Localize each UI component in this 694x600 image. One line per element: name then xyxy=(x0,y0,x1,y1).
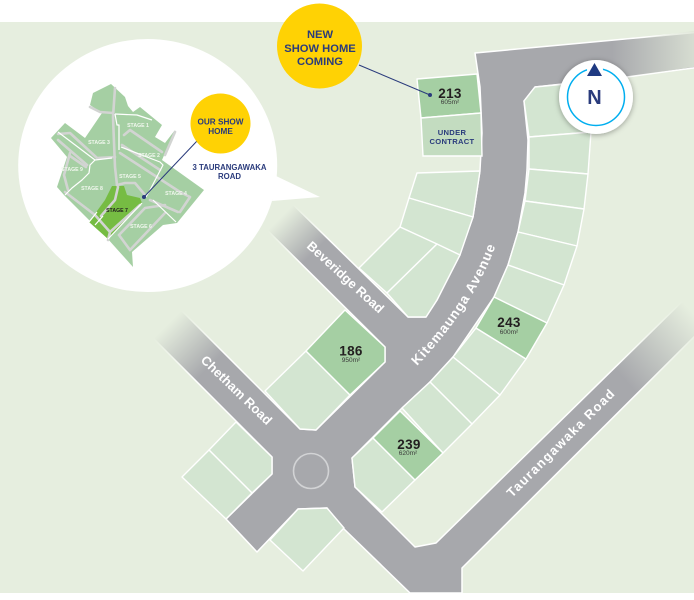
mini map: stage 7 xyxy=(89,186,142,239)
mini map: estate stages: STAGE 8 xyxy=(81,186,103,192)
address text: 3 TAURANGAWAKA xyxy=(193,163,267,172)
mini map: estate stages: STAGE 9 xyxy=(61,167,83,173)
lot 243: 243 xyxy=(497,315,521,330)
new show home badge: COMING xyxy=(297,56,343,68)
lots: west side of Kitemaunga Avenue xyxy=(265,171,480,430)
mini map: estate stages xyxy=(51,84,204,267)
lot 239: 620m² xyxy=(399,450,418,457)
new show home badge: SHOW HOME xyxy=(284,43,356,55)
address text: ROAD xyxy=(218,172,241,181)
lot 213 xyxy=(417,74,481,118)
lots: around the roundabout xyxy=(182,422,344,571)
mini map: estate stages: STAGE 2 xyxy=(138,153,160,159)
roundabout xyxy=(294,454,328,488)
new show home leader line xyxy=(359,65,432,97)
mini map: estate stages: STAGE 5 xyxy=(119,174,141,180)
path used by the Kitemaunga label xyxy=(417,242,497,366)
lot under contract: CONTRACT xyxy=(429,137,475,146)
lot 213: 213 xyxy=(438,86,462,101)
lot under contract xyxy=(421,113,482,156)
road label: Chetham Road: Chetham Road xyxy=(198,352,275,428)
north compass: N xyxy=(587,87,602,109)
lot 186 xyxy=(306,310,385,395)
road label: Beveridge Road: Beveridge Road xyxy=(304,238,387,316)
road label: Kitemaunga Avenue: Kitemaunga Avenue xyxy=(411,245,494,366)
north compass xyxy=(559,60,633,134)
mini map: estate stages: STAGE 6 xyxy=(130,224,152,230)
our show home badge: OUR SHOW xyxy=(198,118,244,126)
lot 239 xyxy=(373,411,443,480)
road label: Taurangawaka Road: Taurangawaka Road xyxy=(504,386,617,500)
lot 239: 239 xyxy=(397,437,421,452)
our show home badge xyxy=(190,94,250,154)
lot 213: 605m² xyxy=(441,99,460,106)
callout bubble: location map xyxy=(18,39,320,292)
mini map: estate stages: STAGE 7 xyxy=(106,208,128,214)
lot 186: 950m² xyxy=(342,357,361,364)
road network xyxy=(135,30,694,593)
mini map: estate stages: STAGE 4 xyxy=(165,191,187,197)
lot 186: 186 xyxy=(339,344,363,358)
lot 243 xyxy=(476,297,547,359)
lot under contract: UNDER xyxy=(438,128,466,137)
our show home badge: HOME xyxy=(208,127,233,136)
mini map: estate stages: STAGE 1 xyxy=(127,123,149,129)
new show home badge: NEW xyxy=(307,29,333,41)
our show home marker line xyxy=(142,141,197,199)
address text xyxy=(193,163,267,181)
new show home badge xyxy=(277,4,362,88)
lot 243: 600m² xyxy=(500,329,519,336)
lots: east side of Kitemaunga Avenue xyxy=(352,83,591,512)
mini map: estate stages: STAGE 3 xyxy=(88,140,110,146)
